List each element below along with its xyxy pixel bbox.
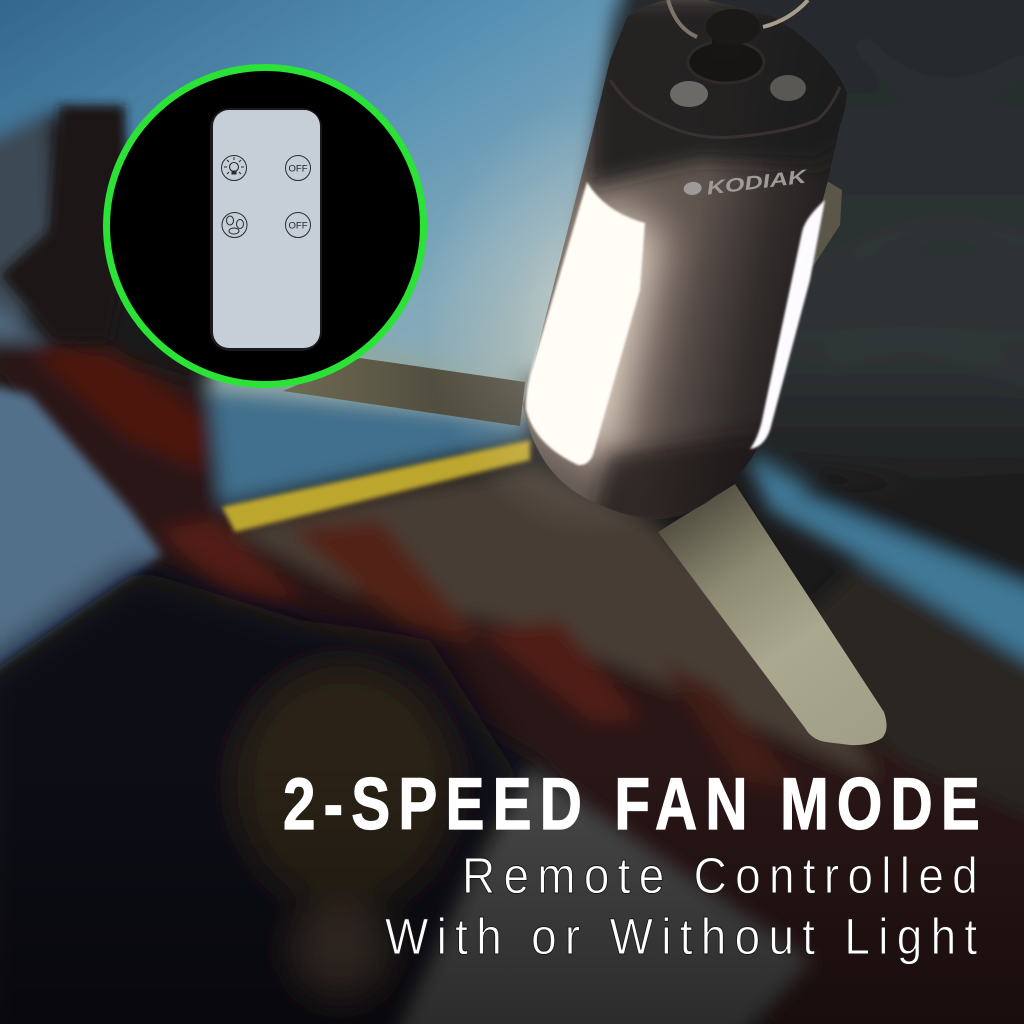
light glow [425,100,755,540]
bottom fan blade [658,484,887,745]
cap ridge [610,80,840,138]
yellow tent strip [222,440,530,532]
off button top: OFF [288,164,308,174]
off button bottom: OFF [288,220,308,232]
off button bottom [286,212,310,238]
lantern fan [283,0,887,745]
fan button [222,212,247,238]
left light panel [526,182,645,465]
subtitle line 1: Remote Controlled [462,848,978,905]
subtitle line 2: With or Without Light [385,909,978,966]
lantern body light falloff [540,0,860,530]
green ring [106,68,424,384]
remote inset [106,68,424,384]
lantern body [523,0,847,519]
heading: 2-SPEED FAN MODE [283,764,980,846]
left fan blade [283,358,525,426]
hanging hook [668,0,808,83]
remote control [210,108,322,351]
heading and subtitle [283,764,980,966]
top button left [670,81,708,107]
top button right [770,75,806,101]
bulb button [222,156,246,180]
logo: KODIAK [706,166,809,200]
right light panel [750,200,825,449]
logo [683,166,809,202]
right fan blade [812,178,842,268]
off button top [286,156,310,180]
